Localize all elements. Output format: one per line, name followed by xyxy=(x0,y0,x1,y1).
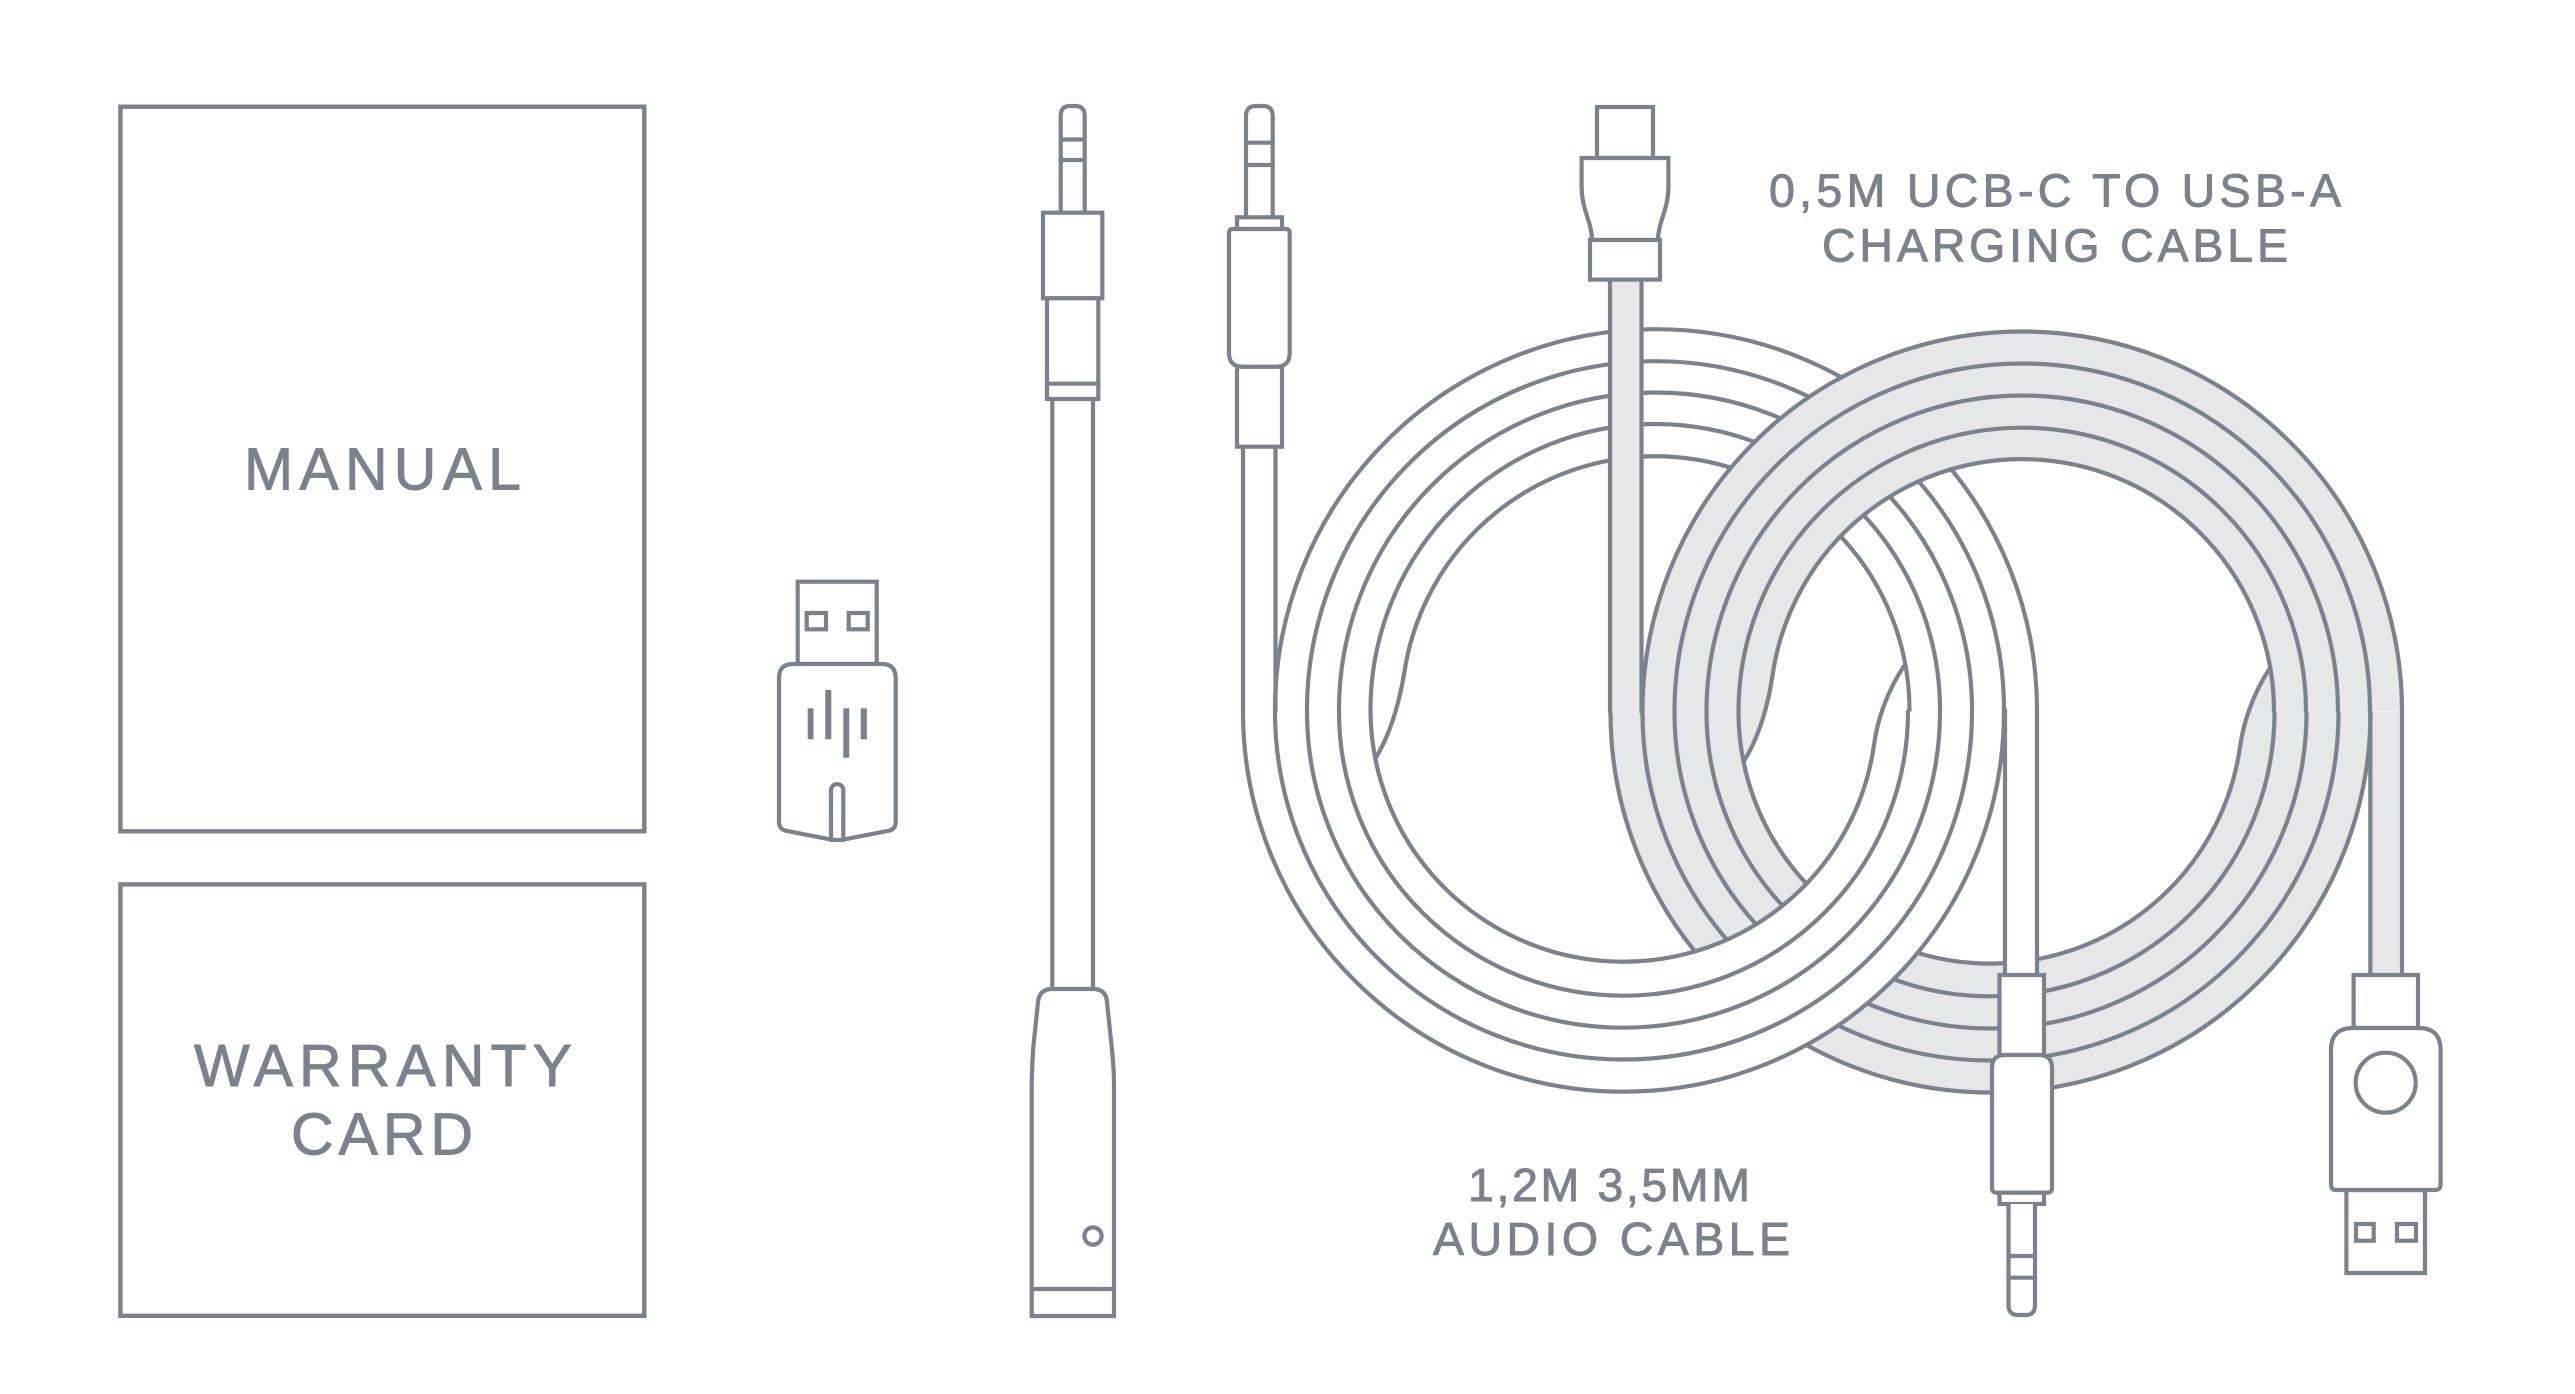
label: charging cable: CHARGING CABLE xyxy=(1822,220,2288,272)
label: warranty card: WARRANTY xyxy=(194,1033,572,1099)
audio cable coil: lower half xyxy=(1243,666,2037,1092)
label: manual: MANUAL xyxy=(244,436,521,502)
charging cable: USB-A connector xyxy=(2331,975,2441,1273)
panel: manual booklet xyxy=(120,107,644,831)
audio cable: 3.5mm jack, bottom end xyxy=(1992,975,2052,1315)
icon: audio adapter xyxy=(1032,106,1114,1316)
charging cable coil xyxy=(1610,281,2402,1092)
label: charging cable: 0,5M UCB-C TO USB-A xyxy=(1769,165,2341,217)
icon: USB dongle xyxy=(779,582,896,840)
label: audio cable: AUDIO CABLE xyxy=(1433,1213,1790,1265)
panel: warranty card xyxy=(120,884,644,1316)
audio cable: 3.5mm jack, top end xyxy=(1229,106,1290,712)
charging cable: USB-C connector xyxy=(1582,107,1668,280)
label: warranty card: CARD xyxy=(291,1102,473,1168)
label: audio cable: 1,2M 3,5MM xyxy=(1468,1159,1750,1211)
audio cable coil: upper half xyxy=(1275,329,2037,760)
